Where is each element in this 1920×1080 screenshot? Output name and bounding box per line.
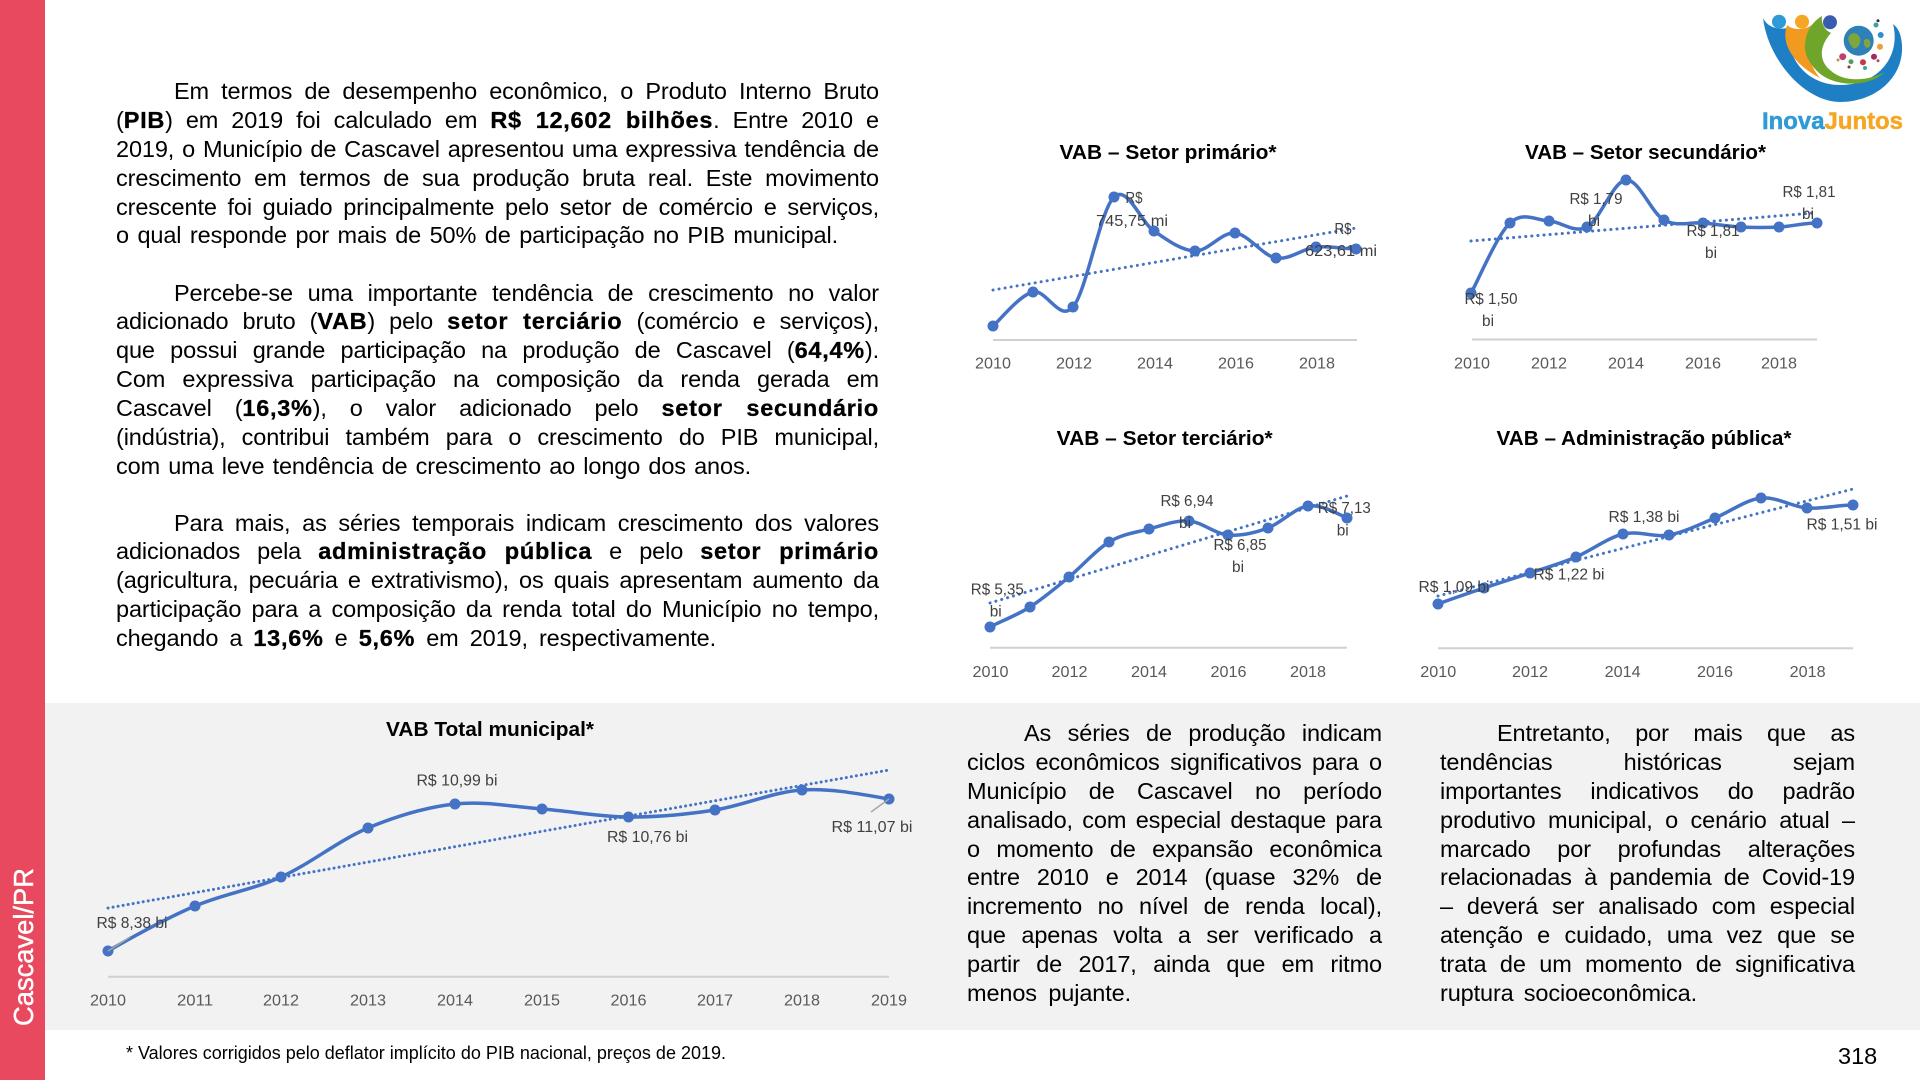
year axis labels: 2012 — [263, 992, 299, 1010]
trend line — [993, 228, 1356, 290]
data labels: bi — [1705, 245, 1717, 262]
year axis labels: 2012 — [1056, 356, 1092, 372]
data line — [1438, 498, 1853, 604]
data labels: bi — [1179, 515, 1191, 532]
paragraph: public administration and primary sector: chegando a 13,6% e 5,6% em 2019, respectivamente. — [116, 625, 716, 651]
paragraph: production series: o momento de expansão econômica — [967, 836, 1382, 862]
year axis labels: 2016 — [1210, 664, 1247, 681]
paragraph: economic performance — [116, 78, 879, 248]
year axis labels: 2012 — [1512, 664, 1548, 681]
data labels: R$ 11,07 bi — [832, 819, 912, 836]
paragraph: tertiary and secondary sectors: adicionado bruto (VAB) pelo setor terciário (comércio e serviços), — [116, 308, 879, 334]
year axis labels: 2014 — [437, 992, 473, 1010]
chart: VAB setor secundário — [1454, 142, 1836, 372]
paragraph: economic performance: 2019, o Município de Cascavel apresentou uma expressiva tendência de — [116, 136, 879, 162]
data labels — [1096, 190, 1377, 260]
year axis labels: 2016 — [1685, 356, 1721, 372]
paragraph: production series: incremento no nível de renda local), — [967, 893, 1382, 919]
chart title: VAB – Setor primário* — [1060, 142, 1277, 164]
year axis labels: 2010 — [972, 664, 1009, 681]
grey bottom band — [45, 703, 1920, 1030]
data labels: R$ — [1334, 221, 1352, 238]
data labels: R$ 6,85 — [1214, 537, 1267, 554]
paragraph: current scenario: trata de um momento de significativa — [1440, 951, 1855, 977]
paragraph: current scenario: importantes indicativos do padrão — [1440, 778, 1855, 804]
paragraph: production series: partir de 2017, ainda que em ritmo — [967, 951, 1382, 977]
year axis labels: 2010 — [1420, 664, 1456, 681]
year axis labels — [1454, 356, 1797, 372]
paragraph: production series: As séries de produção indicam — [1024, 720, 1382, 746]
data labels — [1418, 509, 1878, 596]
trend line — [1471, 213, 1813, 241]
footnote: * Valores corrigidos pelo deflator implícito do PIB nacional, preços de 2019. — [126, 1042, 726, 1062]
year axis labels: 2018 — [1790, 664, 1826, 681]
data line — [990, 506, 1347, 627]
chart title: VAB Total municipal* — [386, 719, 594, 741]
data labels: R$ 7,13 — [1318, 500, 1371, 517]
icon: InovaJuntos logo: InovaJuntos — [1762, 108, 1903, 135]
data labels: bi — [1802, 206, 1814, 223]
paragraph: tertiary and secondary sectors — [116, 280, 879, 479]
data labels: 745,75 mi — [1096, 213, 1168, 230]
data labels: R$ 1,09 bi — [1418, 579, 1490, 596]
data markers — [1432, 492, 1858, 610]
year axis labels: 2011 — [177, 992, 213, 1010]
paragraph: current scenario: Entretanto, por mais que as — [1497, 720, 1855, 746]
label leader lines — [108, 799, 889, 951]
sidebar label: Cascavel/PR — [8, 868, 39, 1026]
data labels: 623,61 mi — [1305, 243, 1377, 260]
data labels: R$ 1,22 bi — [1534, 566, 1604, 584]
paragraph: economic performance: crescimento em termos de sua produção bruta real. Este movimento — [116, 165, 879, 191]
data labels — [96, 772, 912, 932]
paragraph: economic performance: (PIB) em 2019 foi calculado em R$ 12,602 bilhões. Entre 2010 e — [116, 107, 879, 133]
chart title: VAB – Setor terciário* — [1057, 428, 1273, 450]
paragraph: economic performance: Em termos de desempenho econômico, o Produto Interno Bruto — [174, 78, 879, 104]
paragraph: tertiary and secondary sectors: Percebe-se uma importante tendência de crescimento no valor — [174, 280, 879, 306]
paragraph: public administration and primary sector: adicionados pela administração pública e pelo setor primário — [116, 538, 879, 564]
paragraph: production series: entre 2010 e 2014 (quase 32% de — [967, 864, 1382, 890]
data labels: R$ 8,38 bi — [96, 915, 168, 932]
paragraph: economic performance: o qual responde por mais de 50% de participação no PIB municipal. — [116, 222, 838, 248]
data labels: R$ 1,50 — [1464, 291, 1518, 308]
data labels: bi — [1588, 213, 1600, 230]
year axis labels: 2017 — [697, 992, 733, 1010]
trend line — [1438, 489, 1853, 596]
data markers — [988, 192, 1362, 332]
data labels: R$ 10,76 bi — [607, 829, 688, 846]
year axis labels: 2019 — [871, 992, 907, 1010]
paragraph: current scenario: marcado por profundas alterações — [1440, 836, 1855, 862]
paragraph: tertiary and secondary sectors: (indústria), contribui também para o crescimento do PIB municipal, — [116, 424, 879, 450]
data labels: R$ 1,81 — [1782, 184, 1836, 201]
paragraph: tertiary and secondary sectors: que possui grande participação na produção de Cascavel (64,4%). — [116, 337, 879, 363]
year axis labels: 2014 — [1605, 664, 1641, 681]
year axis labels: 2012 — [1052, 664, 1088, 681]
data labels: R$ 6,94 — [1160, 493, 1214, 510]
paragraph: tertiary and secondary sectors: Com expressiva participação na composição da renda gerada em — [116, 366, 879, 392]
paragraph: production series: ciclos econômicos significativos para o — [967, 749, 1382, 775]
paragraph: production series: analisado, com especial destaque para — [967, 807, 1382, 833]
data labels — [1464, 184, 1836, 330]
year axis labels: 2018 — [784, 992, 820, 1010]
chart title: VAB – Administração pública* — [1496, 428, 1792, 450]
year axis labels: 2018 — [1299, 356, 1335, 372]
trend line — [990, 496, 1347, 603]
data labels: bi — [1482, 313, 1494, 330]
data labels — [971, 493, 1371, 620]
data labels: bi — [990, 604, 1002, 620]
year axis labels: 2012 — [1531, 356, 1567, 372]
year axis labels: 2018 — [1290, 664, 1326, 681]
data markers — [1466, 174, 1822, 298]
data labels: R$ 1,81 — [1686, 223, 1740, 240]
year axis labels: 2014 — [1137, 356, 1173, 372]
paragraph: current scenario: ruptura socioeconômica. — [1440, 980, 1697, 1006]
year axis labels: 2010 — [90, 992, 126, 1010]
year axis labels: 2010 — [1454, 356, 1490, 372]
data line — [108, 790, 889, 951]
paragraph: tertiary and secondary sectors: Cascavel (16,3%), o valor adicionado pelo setor secundário — [116, 395, 879, 421]
paragraph: production series: menos pujante. — [967, 980, 1131, 1006]
year axis labels — [975, 356, 1335, 372]
chart title: VAB – Setor secundário* — [1525, 142, 1766, 164]
paragraph: current scenario: relacionadas à pandemia de Covid-19 — [1440, 864, 1855, 890]
paragraph: current scenario: tendências históricas sejam — [1440, 749, 1855, 775]
data markers — [984, 500, 1352, 632]
year axis labels: 2016 — [1218, 356, 1254, 372]
data labels: R$ 1,38 bi — [1608, 509, 1680, 526]
paragraph: current scenario — [1440, 720, 1856, 1006]
data labels: R$ 1,79 — [1570, 191, 1623, 208]
chart: VAB setor terciário — [971, 428, 1371, 681]
paragraph: production series: que apenas volta a ser verificado a — [967, 922, 1382, 948]
paragraph: tertiary and secondary sectors: com uma leve tendência de crescimento ao longo dos anos. — [116, 453, 751, 479]
chart: VAB administração pública — [1418, 428, 1878, 681]
paragraph: public administration and primary sector — [116, 510, 880, 651]
paragraph: production series — [967, 720, 1382, 1006]
year axis labels — [90, 992, 907, 1010]
chart: VAB total municipal — [90, 719, 912, 1010]
chart: VAB setor primário — [975, 142, 1377, 372]
year axis labels: 2016 — [1697, 664, 1733, 681]
data labels: R$ 5,35 — [971, 582, 1024, 598]
data labels: R$ 1,51 bi — [1806, 516, 1878, 534]
data labels: R$ 10,99 bi — [416, 772, 498, 790]
sidebar — [0, 0, 45, 1080]
data labels: bi — [1232, 559, 1244, 576]
page number: 318 — [1838, 1043, 1877, 1069]
year axis labels — [972, 664, 1326, 681]
icon: InovaJuntos logo — [1762, 15, 1903, 135]
year axis labels: 2013 — [350, 992, 386, 1010]
data labels: bi — [1337, 522, 1349, 540]
year axis labels: 2016 — [610, 992, 647, 1010]
paragraph: current scenario: atenção e cuidado, uma vez que se — [1440, 922, 1855, 948]
year axis labels — [1420, 664, 1826, 681]
paragraph: current scenario: – deverá ser analisado com especial — [1440, 893, 1855, 919]
year axis labels: 2014 — [1608, 356, 1644, 372]
paragraph: public administration and primary sector: (agricultura, pecuária e extrativismo), os quais apresentam aumento da — [116, 567, 879, 593]
data markers — [102, 784, 894, 956]
year axis labels: 2010 — [975, 356, 1011, 372]
paragraph: public administration and primary sector: Para mais, as séries temporais indicam crescimento dos valores — [174, 510, 879, 536]
paragraph: economic performance: crescente foi guiado principalmente pelo setor de comércio e serviços, — [116, 194, 879, 220]
data labels: R$ — [1126, 190, 1143, 207]
year axis labels: 2018 — [1761, 356, 1797, 372]
year axis labels: 2015 — [524, 992, 560, 1010]
data line — [993, 194, 1356, 326]
trend line — [108, 770, 889, 908]
paragraph: production series: Município de Cascavel no período — [967, 778, 1382, 804]
paragraph: public administration and primary sector: participação para a composição da renda total do Município no tempo, — [116, 596, 879, 622]
year axis labels: 2014 — [1131, 664, 1167, 681]
data line — [1471, 180, 1817, 293]
paragraph: current scenario: produtivo municipal, o cenário atual – — [1440, 807, 1855, 833]
